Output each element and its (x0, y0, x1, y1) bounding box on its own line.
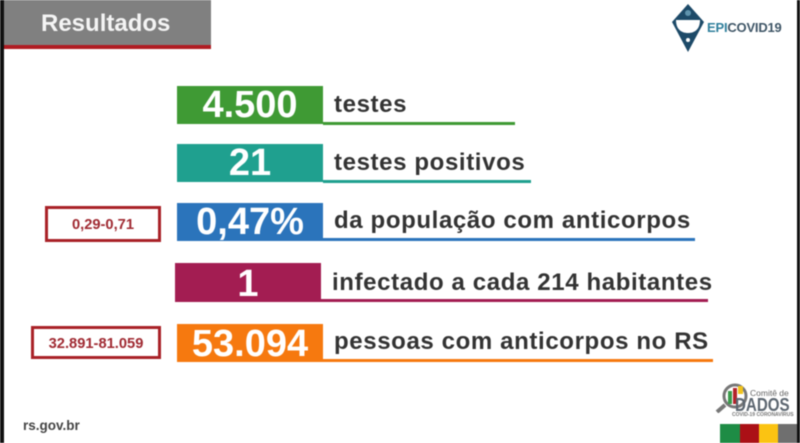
value (177, 86, 323, 124)
value: 21 (229, 142, 271, 184)
icon: magnifier with bars (715, 382, 748, 414)
value (175, 263, 321, 302)
red segment (740, 424, 759, 443)
row: 1 infectado a cada 214 habitantes (174, 262, 713, 305)
logo: EPICOVID19 (672, 4, 782, 52)
row: 4.500 testes (176, 84, 516, 126)
label: testes (334, 91, 407, 118)
confidence interval box: 32.891-81.059 (31, 326, 161, 359)
wordmark sub: COVID-19 CORONAVÍRUS (732, 412, 794, 418)
value: 1 (237, 263, 259, 305)
label: testes positivos (334, 149, 525, 176)
row: 21 testes positivos (176, 142, 532, 184)
wordmark top: Comitê de (750, 388, 789, 398)
confidence interval box: 0,29-0,71: 0,29-0,71 (72, 217, 134, 233)
underline (323, 180, 531, 183)
value: 53.094 (192, 323, 308, 365)
value (177, 144, 323, 182)
icon: diamond emblem (672, 4, 704, 52)
logo wordmark: EPICOVID19 (707, 20, 782, 35)
underline (323, 359, 713, 362)
underline (323, 122, 515, 125)
title banner: Resultados (4, 0, 211, 49)
yellow segment (759, 424, 778, 443)
right black edge (797, 0, 800, 443)
row: 53.094 pessoas com anticorpos no RS (176, 323, 714, 365)
logo: Comitê de Dados (715, 382, 794, 418)
flag color strip (719, 423, 798, 443)
confidence interval box: 0,29-0,71 (45, 206, 161, 242)
underline (323, 238, 695, 241)
confidence interval box: 32.891-81.059: 32.891-81.059 (49, 336, 143, 352)
gray segment (778, 424, 797, 443)
label: da população com anticorpos (334, 207, 691, 234)
label: infectado a cada 214 habitantes (332, 269, 713, 296)
heading: Resultados (41, 10, 170, 37)
banner red underline (4, 45, 211, 49)
value: 0,47% (196, 201, 304, 243)
wordmark main: DADOS (735, 395, 790, 415)
underline (321, 299, 708, 302)
footer url: rs.gov.br (23, 418, 80, 433)
value (177, 203, 323, 241)
label: pessoas com anticorpos no RS (334, 328, 709, 355)
row: 0,47% da população com anticorpos (176, 201, 696, 243)
green segment (720, 424, 740, 443)
value: 4.500 (202, 84, 298, 126)
left black edge (0, 0, 4, 443)
